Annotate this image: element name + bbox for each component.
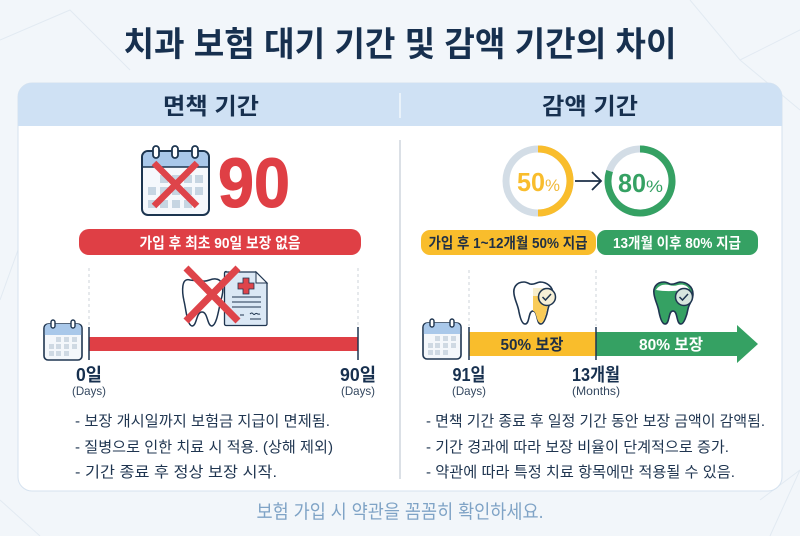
banner: no coverage [79,229,361,255]
panel header band [18,83,782,126]
label: 0 days [72,365,106,398]
arrow: 50 to 80 [575,172,601,190]
donut: 80 percent: % [646,177,663,196]
banner: 80 percent payment: 13개월 이후 80% 지급 [613,235,741,252]
label: 13 months: 13개월 [572,365,620,385]
donut: 50 percent [506,149,570,213]
text block: reduction notes: - 면책 기간 종료 후 일정 기간 동안 보장 금액이 감액됨. [426,413,765,430]
timeline guides [89,268,358,326]
label: 91 days: 91일 [452,365,486,385]
big number 90: 90 [218,144,290,222]
text block: reduction notes: - 기간 경과에 따라 보장 비율이 단계적으로 증가. [426,439,729,456]
timeline arrow: 80 percent segment [596,325,758,363]
label: 91 days: (Days) [452,384,486,398]
timeline ticks [469,327,596,360]
label: 0 days: 0일 [76,365,102,385]
text block: exemption notes: - 보장 개시일까지 보험금 지급이 면제됨. [75,413,330,430]
label: 90 days: (Days) [341,384,375,398]
text block: exemption notes [75,413,333,481]
text block: reduction notes [426,413,765,481]
label: 0 days: (Days) [72,384,106,398]
label: 90 days [340,365,376,398]
label: 90 days: 90일 [340,365,376,385]
donut: 80 percent [608,149,672,213]
timeline arrow: 80 percent segment: 80% 보장 [639,336,703,354]
banner: no coverage: 가입 후 최초 90일 보장 없음 [140,235,301,252]
banner: 50 percent payment: 가입 후 1~12개월 50% 지급 [428,235,588,252]
title: 치과 보험 대기 기간 및 감액 기간의 차이 [124,26,676,64]
label: 91 days [452,365,486,398]
donut: 80 percent: 80 [618,168,646,198]
icon: small calendar left [44,320,82,360]
text block: exemption notes: - 질병으로 인한 치료 시 적용. (상해 제외) [75,439,333,456]
banner: 80 percent payment [597,230,758,255]
banner: 50 percent payment [421,230,596,255]
icon: mostly covered tooth [654,282,693,324]
text block: exemption notes: - 기간 종료 후 정상 보장 시작. [75,464,277,481]
heading: reduction period: 감액 기간 [542,93,638,119]
label: 13 months [572,365,620,398]
footer note: 보험 가입 시 약관을 꼼꼼히 확인하세요. [256,501,544,523]
timeline bar: 0 to 90 days [89,327,358,360]
timeline bar: 50 percent segment: 50% 보장 [500,336,564,354]
donut: 50 percent: 50 [517,167,545,197]
panel: comparison card [18,83,782,491]
icon: half covered tooth [514,282,556,324]
icon: crossed-out calendar [142,146,209,215]
icon: crossed-out tooth and medical document [183,268,267,326]
heading: exemption period: 면책 기간 [163,93,259,119]
icon: small calendar right [423,319,461,359]
text block: reduction notes: - 약관에 따라 특정 치료 항목에만 적용될 수 있음. [426,464,735,481]
donut: 50 percent: % [545,176,560,195]
timeline bar: 50 percent segment [469,332,596,356]
label: 13 months: (Months) [572,384,620,398]
timeline guides [469,270,596,326]
